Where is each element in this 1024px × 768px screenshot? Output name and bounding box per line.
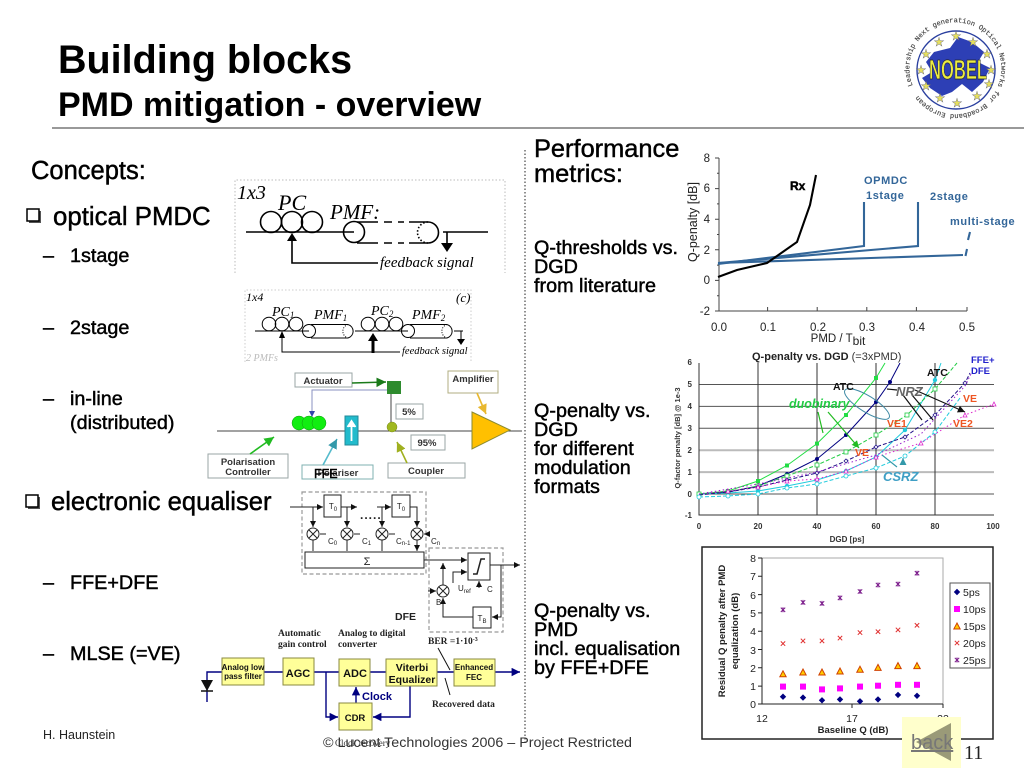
diagram: MLSE receiver chain: pass filter xyxy=(224,672,262,681)
chart: residual Q penalty after equalization: 4 xyxy=(750,626,756,638)
chart: residual Q penalty after equalization: equalization (dB) xyxy=(730,593,741,669)
diagram: MLSE receiver chain: BER =1·10 xyxy=(428,637,473,647)
diagram: MLSE receiver chain: Equalizer xyxy=(389,674,435,686)
concepts list: – xyxy=(43,245,54,267)
title: PMD mitigation - overview xyxy=(58,86,482,124)
concepts list: – xyxy=(43,317,54,339)
diagram: MLSE receiver chain: converter xyxy=(338,640,378,650)
chart: Q-penalty vs DGD: DFE xyxy=(971,366,990,377)
diagram: 1x4 two-stage compensator: 1 xyxy=(290,310,294,320)
diagram: feed-forward equaliser: 1 xyxy=(368,541,372,547)
performance metrics text: from literature xyxy=(534,275,656,297)
chart: Q-penalty vs PMD/Tbit: 2stage xyxy=(930,191,968,203)
chart: Q-penalty vs DGD: VE2 xyxy=(953,418,973,430)
diagram: feed-forward equaliser: 0 xyxy=(334,541,338,547)
chart: Q-penalty vs PMD/Tbit: 2 xyxy=(704,245,710,257)
diagram: MLSE receiver chain: FEC xyxy=(466,673,482,682)
title xyxy=(58,38,482,124)
chart: Q-penalty vs DGD: 20 xyxy=(754,522,763,531)
chart: Q-penalty vs PMD/Tbit: 0.1 xyxy=(760,322,776,334)
diagram: MLSE receiver chain xyxy=(201,629,520,730)
concepts list: in-line xyxy=(70,388,123,410)
chart: Q-penalty vs DGD: Q-factor penalty [dB] @ 1e-3 xyxy=(673,387,682,489)
diagram: MLSE receiver chain: gain control xyxy=(278,640,327,650)
diagram: 1x3 PMD compensator: PC xyxy=(277,190,306,215)
diagram: optical PMD compensator components: Polarisation xyxy=(221,457,275,468)
chart: residual Q penalty after equalization: 17 xyxy=(846,713,858,725)
diagram: 1x3 PMD compensator xyxy=(235,180,505,273)
diagram: feed-forward equaliser: C xyxy=(328,537,334,546)
diagram: feed-forward equaliser: 0 xyxy=(402,507,406,513)
chart: residual Q penalty after equalization: Residual Q penalty after PMD xyxy=(717,565,728,697)
chart: Q-penalty vs DGD: -1 xyxy=(685,511,693,520)
diagram: optical PMD compensator components: Controller xyxy=(225,467,271,478)
logo: NOBEL: ★ xyxy=(952,96,962,110)
chart: Q-penalty vs DGD: VE1 xyxy=(887,418,907,430)
diagram: 1x4 two-stage compensator: 1x4 xyxy=(246,290,263,304)
diagram: feed-forward equaliser xyxy=(290,492,440,574)
legend: 25ps xyxy=(963,655,986,667)
logo: NOBEL: ★ xyxy=(984,77,994,91)
chart: residual Q penalty after equalization xyxy=(702,547,993,739)
diagram: 1x3 PMD compensator: 1x3 xyxy=(237,182,266,204)
label: FFE: FFE xyxy=(314,467,338,481)
diagram: MLSE receiver chain: Automatic xyxy=(278,629,321,639)
chart: Q-penalty vs DGD: FFE+ xyxy=(971,355,995,366)
performance metrics text: Q-penalty vs. xyxy=(534,400,651,422)
back button: back xyxy=(911,732,954,754)
performance metrics text: for different xyxy=(534,438,634,460)
chart: residual Q penalty after equalization: 3 xyxy=(750,645,756,657)
chart: Q-penalty vs DGD: 100 xyxy=(986,522,1000,531)
diagram: 1x4 two-stage compensator: PC xyxy=(272,305,290,320)
chart: Q-penalty vs DGD: 40 xyxy=(813,522,822,531)
chart: Q-penalty vs PMD/Tbit: 1stage xyxy=(866,190,904,202)
diagram: decision feedback equaliser: C xyxy=(487,585,493,594)
diagram: 1x3 PMD compensator: PMF: xyxy=(329,200,380,224)
chart: residual Q penalty after equalization: 2 xyxy=(750,663,756,675)
footer: copyright: © Lucent Technologies 2006 – Project Restricted xyxy=(323,735,632,750)
logo: NOBEL: ★ xyxy=(986,63,996,77)
chart: Q-penalty vs DGD xyxy=(673,351,1000,544)
diagram: MLSE receiver chain: Analog low xyxy=(222,663,265,672)
diagram: decision feedback equaliser: B xyxy=(482,619,486,625)
legend: 15ps xyxy=(963,621,986,633)
diagram: optical PMD compensator components: Amplifier xyxy=(452,374,494,385)
chart: Q-penalty vs DGD: duobinary xyxy=(789,397,850,411)
chart: Q-penalty vs DGD: 1 xyxy=(688,468,693,477)
diagram: optical PMD compensator components xyxy=(208,371,522,479)
concepts list: optical PMDC xyxy=(53,203,211,231)
logo: NOBEL: ★ xyxy=(921,47,931,61)
performance metrics text: DGD xyxy=(534,256,578,278)
concepts list: (distributed) xyxy=(70,412,174,434)
chart: Q-penalty vs DGD: 3 xyxy=(688,424,693,433)
diagram: feed-forward equaliser: C xyxy=(431,537,437,546)
diagram: feed-forward equaliser: T xyxy=(397,502,402,511)
chart: residual Q penalty after equalization: 6 xyxy=(750,590,756,602)
diagram: 1x4 two-stage compensator: 1 xyxy=(343,313,347,323)
performance metrics text: PMD xyxy=(534,619,578,641)
diagram: feed-forward equaliser: ..... xyxy=(360,508,382,522)
chart: Q-penalty vs DGD: ATC xyxy=(927,367,948,379)
chart: Q-penalty vs PMD/Tbit: OPMDC xyxy=(864,175,908,187)
concepts list: – xyxy=(43,388,54,410)
footer: copyright: Clock recovery xyxy=(335,738,391,748)
diagram: feed-forward equaliser: Σ xyxy=(364,556,371,568)
chart: Q-penalty vs PMD/Tbit: Q-penalty [dB] xyxy=(686,182,700,262)
chart: Q-penalty vs PMD/Tbit: 0.2 xyxy=(810,322,826,334)
concepts list: – xyxy=(43,572,54,594)
performance metrics text: by FFE+DFE xyxy=(534,657,649,679)
legend xyxy=(950,583,990,668)
diagram: decision feedback equaliser: B xyxy=(436,598,441,607)
chart: residual Q penalty after equalization: 12 xyxy=(756,713,768,725)
diagram: optical PMD compensator components: Actuator xyxy=(303,376,343,387)
concepts list: Concepts: xyxy=(31,157,146,185)
chart: residual Q penalty after equalization: 0 xyxy=(750,699,756,711)
chart: Q-penalty vs DGD: 6 xyxy=(688,358,693,367)
chart: Q-penalty vs PMD/Tbit: 0.0 xyxy=(711,322,727,334)
diagram: feed-forward equaliser: 0 xyxy=(334,507,338,513)
diagram: MLSE receiver chain: Clock xyxy=(362,691,393,703)
chart: Q-penalty vs PMD/Tbit: 6 xyxy=(704,183,710,195)
diagram: decision feedback equaliser: ref xyxy=(464,589,471,595)
chart: Q-penalty vs PMD/Tbit: PMD / T xyxy=(811,333,853,345)
logo: NOBEL: ★ xyxy=(972,89,982,103)
chart: Q-penalty vs PMD/Tbit: multi-stage xyxy=(950,216,1015,228)
logo: NOBEL: ★ xyxy=(968,35,978,49)
logo: NOBEL: ★ xyxy=(935,91,945,105)
chart: Q-penalty vs DGD: CSRZ xyxy=(883,469,919,484)
diagram: MLSE receiver chain: AGC xyxy=(286,668,310,680)
diagram: 1x4 two-stage compensator: PC xyxy=(371,304,389,319)
logo: NOBEL: ★ xyxy=(921,79,931,93)
performance metrics text: DGD xyxy=(534,419,578,441)
chart: Q-penalty vs PMD/Tbit: 0.5 xyxy=(959,322,975,334)
performance metrics text: metrics: xyxy=(534,160,623,188)
performance metrics text: modulation xyxy=(534,457,631,479)
diagram: 1x4 two-stage compensator: 2 PMFs xyxy=(246,353,278,364)
concepts list: MLSE (=VE) xyxy=(70,643,180,665)
diagram: feed-forward equaliser: C xyxy=(396,537,402,546)
title: Building blocks xyxy=(58,38,352,82)
diagram: feed-forward equaliser: T xyxy=(329,502,334,511)
concepts list: 2stage xyxy=(70,317,129,339)
chart: residual Q penalty after equalization: 8 xyxy=(750,553,756,565)
logo: NOBEL: Leadership Next generation Optical Networks for Broadband European xyxy=(904,18,1006,120)
diagram: 1x4 two-stage compensator: 2 xyxy=(389,309,394,319)
performance metrics text: incl. equalisation xyxy=(534,638,680,660)
diagram: 1x4 two-stage compensator: PMF xyxy=(412,308,441,323)
logo: NOBEL: ★ xyxy=(951,29,961,43)
chart: residual Q penalty after equalization: Baseline Q (dB) xyxy=(818,725,888,736)
concepts list xyxy=(26,157,272,665)
diagram: optical PMD compensator components: Polariser xyxy=(318,468,359,479)
concepts list: – xyxy=(43,643,54,665)
chart: Q-penalty vs DGD: VE xyxy=(963,393,977,405)
concepts list: FFE+DFE xyxy=(70,572,158,594)
concepts list: electronic equaliser xyxy=(51,488,272,516)
chart: Q-penalty vs DGD: VE xyxy=(855,447,869,459)
diagram: 1x4 two-stage compensator xyxy=(245,290,471,364)
chart: residual Q penalty after equalization: 1 xyxy=(750,681,756,693)
chart: Q-penalty vs DGD: DGD [ps] xyxy=(830,535,865,544)
label: DFE: DFE xyxy=(395,611,416,623)
chart: Q-penalty vs PMD/Tbit: 4 xyxy=(704,214,711,226)
chart: Q-penalty vs PMD/Tbit xyxy=(686,153,1015,348)
chart: Q-penalty vs DGD: ATC xyxy=(833,381,854,393)
chart: Q-penalty vs PMD/Tbit: -2 xyxy=(700,306,710,318)
chart: Q-penalty vs PMD/Tbit: 0.4 xyxy=(909,322,926,334)
diagram: optical PMD compensator components: 95% xyxy=(417,438,437,449)
diagram: feed-forward equaliser: n-1 xyxy=(402,541,411,547)
diagram: 1x4 two-stage compensator: (c) xyxy=(456,290,470,305)
diagram: MLSE receiver chain: ADC xyxy=(343,668,367,680)
back button xyxy=(902,717,961,768)
diagram: decision feedback equaliser: U xyxy=(458,584,464,593)
diagram: optical PMD compensator components: Coupler xyxy=(408,466,444,477)
diagram: MLSE receiver chain: CDR xyxy=(345,713,365,724)
chart: Q-penalty vs PMD/Tbit: bit xyxy=(853,334,866,348)
chart: Q-penalty vs DGD: 60 xyxy=(872,522,881,531)
legend: 20ps xyxy=(963,638,986,650)
legend: 10ps xyxy=(963,604,986,616)
concepts list: 1stage xyxy=(70,245,129,267)
diagram: feed-forward equaliser: C xyxy=(362,537,368,546)
performance metrics text: formats xyxy=(534,476,600,498)
chart: residual Q penalty after equalization: 7 xyxy=(750,571,756,583)
diagram: feed-forward equaliser: n xyxy=(437,541,440,547)
chart: Q-penalty vs DGD: 4 xyxy=(688,402,693,411)
chart: Q-penalty vs DGD: Q-penalty vs. DGD (=3xPMD) xyxy=(752,351,901,363)
chart: Q-penalty vs PMD/Tbit: 0 xyxy=(704,275,710,287)
chart: Q-penalty vs PMD/Tbit: Rx xyxy=(790,179,806,193)
diagram: MLSE receiver chain: Recovered data xyxy=(432,700,495,710)
diagram: 1x4 two-stage compensator: 2 xyxy=(441,313,446,323)
chart: Q-penalty vs PMD/Tbit: 0.3 xyxy=(859,322,875,334)
chart: residual Q penalty after equalization: 22 xyxy=(937,713,949,725)
chart: Q-penalty vs DGD: 2 xyxy=(688,446,693,455)
diagram: decision feedback equaliser xyxy=(424,548,520,632)
performance metrics text: Performance xyxy=(534,135,679,163)
performance metrics text: Q-penalty vs. xyxy=(534,600,651,622)
diagram: optical PMD compensator components: 5% xyxy=(402,407,416,418)
diagram: MLSE receiver chain: -3 xyxy=(473,637,478,643)
chart: Q-penalty vs DGD: 5 xyxy=(688,380,693,389)
chart: Q-penalty vs DGD: NRZ xyxy=(896,384,924,399)
logo: NOBEL: ★ xyxy=(934,35,944,49)
divider: vertical dotted line xyxy=(524,150,526,745)
diagram: MLSE receiver chain: Enhanced xyxy=(455,663,493,672)
diagram: decision feedback equaliser: T xyxy=(478,614,482,623)
diagram: 1x4 two-stage compensator: PMF xyxy=(314,308,343,323)
diagram: MLSE receiver chain: Viterbi xyxy=(396,662,428,674)
chart: Q-penalty vs DGD: 80 xyxy=(931,522,940,531)
chart: Q-penalty vs DGD: 0 xyxy=(688,490,693,499)
diagram: 1x4 two-stage compensator: feedback signal xyxy=(402,346,468,357)
page number: 11 xyxy=(964,742,983,764)
logo: NOBEL: ★ xyxy=(916,63,926,77)
performance metrics text: Q-thresholds vs. xyxy=(534,237,678,259)
diagram: MLSE receiver chain: Analog to digital xyxy=(338,629,406,639)
chart: Q-penalty vs DGD: 0 xyxy=(697,522,702,531)
chart: Q-penalty vs PMD/Tbit: 8 xyxy=(704,153,710,165)
legend: 5ps xyxy=(963,587,980,599)
logo: NOBEL: ★ xyxy=(982,47,992,61)
performance metrics text xyxy=(534,135,680,679)
chart: residual Q penalty after equalization: 5 xyxy=(750,608,756,620)
footer: author: H. Haunstein xyxy=(43,728,115,742)
diagram: 1x3 PMD compensator: feedback signal xyxy=(380,255,474,271)
